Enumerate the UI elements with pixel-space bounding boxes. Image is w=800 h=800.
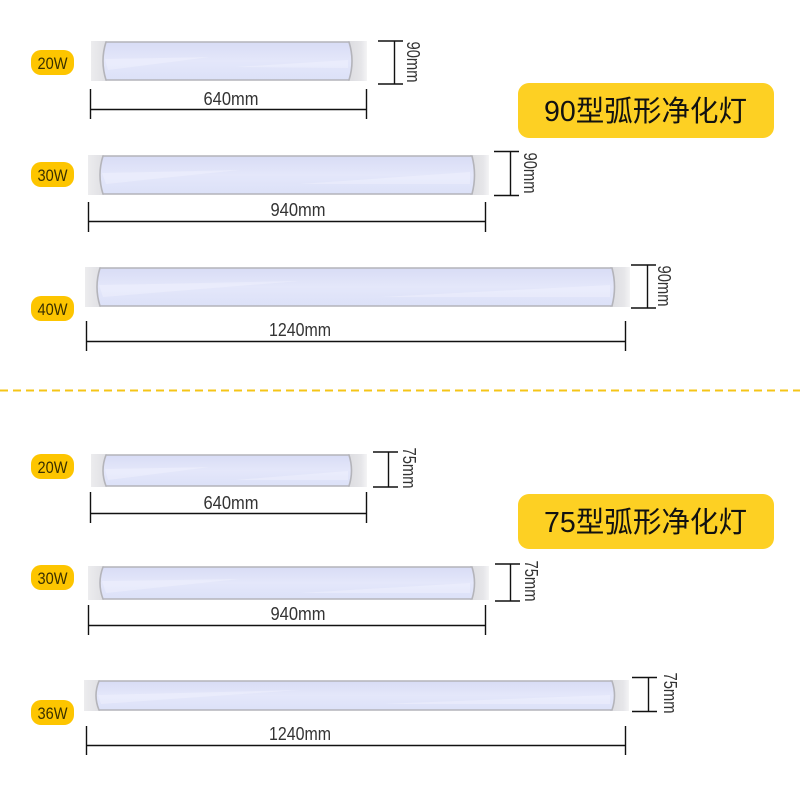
- badge: 30W (75 type): [31, 565, 74, 590]
- dimension: 75mm height: 75mm: [660, 672, 680, 714]
- lamp: 90 type 20W: [91, 41, 367, 81]
- dimension: 90mm height: [494, 152, 540, 196]
- badge: 30W (90 type): 30W: [38, 166, 68, 185]
- badge: 30W (75 type): 30W: [38, 569, 68, 588]
- dimension: 940mm width: [88, 200, 486, 232]
- dimension: 1240mm width: [86, 724, 626, 755]
- badge: 36W (75 type): [31, 700, 74, 725]
- dimension: 940mm width: 940mm: [270, 604, 326, 624]
- badge: 20W (90 type): 20W: [38, 54, 68, 73]
- badge: 40W (90 type): 40W: [38, 300, 68, 319]
- dimension: 75mm height: [495, 560, 541, 602]
- dimension: 75mm height: 75mm: [521, 560, 541, 602]
- badge: 20W (75 type): 20W: [38, 458, 68, 477]
- dimension: 1240mm width: [86, 320, 626, 351]
- heading: 90 type: [518, 83, 774, 138]
- dimension: 90mm height: 90mm: [520, 152, 540, 194]
- heading: 75 type: 75型弧形净化灯: [544, 506, 747, 539]
- dimension: 640mm width: [90, 492, 366, 523]
- heading: 90 type: 90型弧形净化灯: [544, 95, 747, 128]
- dimension: 940mm width: [88, 604, 486, 635]
- section divider: [0, 390, 800, 392]
- badge: 20W (75 type): [31, 454, 74, 479]
- dimension: 75mm height: [373, 448, 419, 488]
- dimension: 75mm height: [632, 672, 680, 714]
- lamp: 75 type 20W: [91, 454, 367, 487]
- heading: 75 type: [518, 494, 774, 549]
- badge: 30W (90 type): [31, 162, 74, 187]
- lamp: 90 type 30W: [88, 155, 489, 195]
- dimension: 90mm height: 90mm: [403, 42, 423, 82]
- lamp: 90 type 40W: [85, 267, 630, 307]
- dimension: 1240mm width: 1240mm: [269, 320, 331, 340]
- dimension: 75mm height: 75mm: [399, 448, 419, 488]
- badge: 40W (90 type): [31, 296, 74, 321]
- lamp: 75 type 36W: [84, 680, 629, 711]
- lamp: 75 type 30W: [88, 566, 489, 600]
- badge: 36W (75 type): 36W: [38, 704, 68, 723]
- dimension: 940mm width: 940mm: [270, 200, 326, 220]
- dimension: 640mm width: [90, 89, 366, 119]
- dimension: 90mm height: 90mm: [654, 266, 674, 306]
- dimension: 640mm width: 640mm: [204, 89, 258, 109]
- dimension: 90mm height: [631, 265, 674, 308]
- badge: 20W (90 type): [31, 50, 74, 75]
- dimension: 90mm height: [378, 41, 423, 84]
- dimension: 640mm width: 640mm: [204, 493, 258, 513]
- dimension: 1240mm width: 1240mm: [269, 724, 331, 744]
